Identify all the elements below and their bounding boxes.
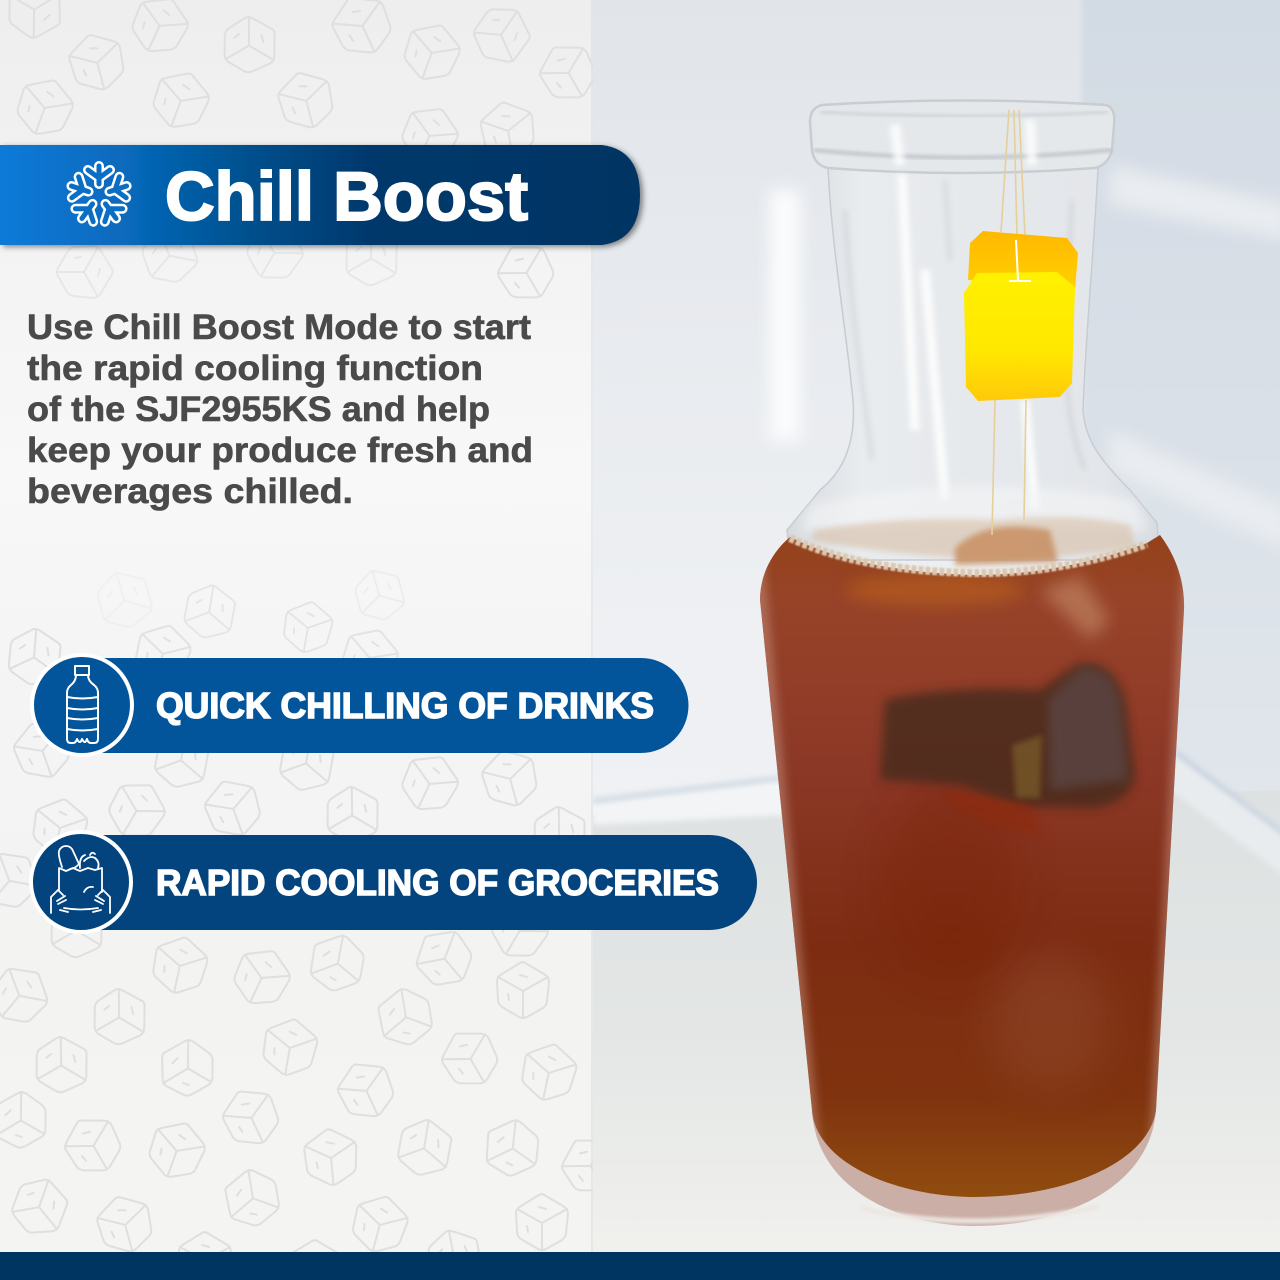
description text block: keep your produce fresh and [27, 431, 533, 470]
description text block: the rapid cooling function [27, 349, 483, 388]
tea liquid body [760, 535, 1184, 1197]
left panel with ice cube pattern [0, 0, 627, 1280]
icon: snowflake [68, 166, 130, 225]
yellow tea tag back [968, 231, 1078, 290]
icon: water bottle [67, 666, 98, 743]
description text block: of the SJF2955KS and help [27, 390, 490, 429]
tea residue above waterline [810, 517, 1135, 558]
tea bag strings [992, 110, 1026, 535]
pill label: QUICK CHILLING OF DRINKS [156, 685, 654, 726]
description text block: Use Chill Boost Mode to start [27, 308, 531, 347]
foam line at waterline [790, 538, 1147, 573]
description text block: beverages chilled. [27, 472, 353, 511]
carafe glass neck and shoulder [787, 168, 1160, 560]
submerged tea bag [880, 663, 1135, 835]
photo: glass carafe with iced tea [755, 100, 1190, 1226]
carafe rim [810, 100, 1114, 173]
photo background: refrigerator interior [593, 0, 1280, 1280]
feature pill: quick chilling of drinks [30, 653, 689, 757]
glass base [812, 1110, 1156, 1226]
description text block [27, 308, 533, 511]
title banner [0, 145, 640, 245]
pill label: RAPID COOLING OF GROCERIES [156, 862, 719, 903]
heading: Chill Boost [165, 158, 528, 235]
bottom navy bar [0, 1252, 1280, 1280]
yellow tea tag front [964, 272, 1075, 401]
icon: grocery bag held by hands [51, 846, 110, 913]
frosted glass sheen and liquid tones [755, 540, 1190, 1160]
feature pill: rapid cooling of groceries [29, 830, 757, 934]
